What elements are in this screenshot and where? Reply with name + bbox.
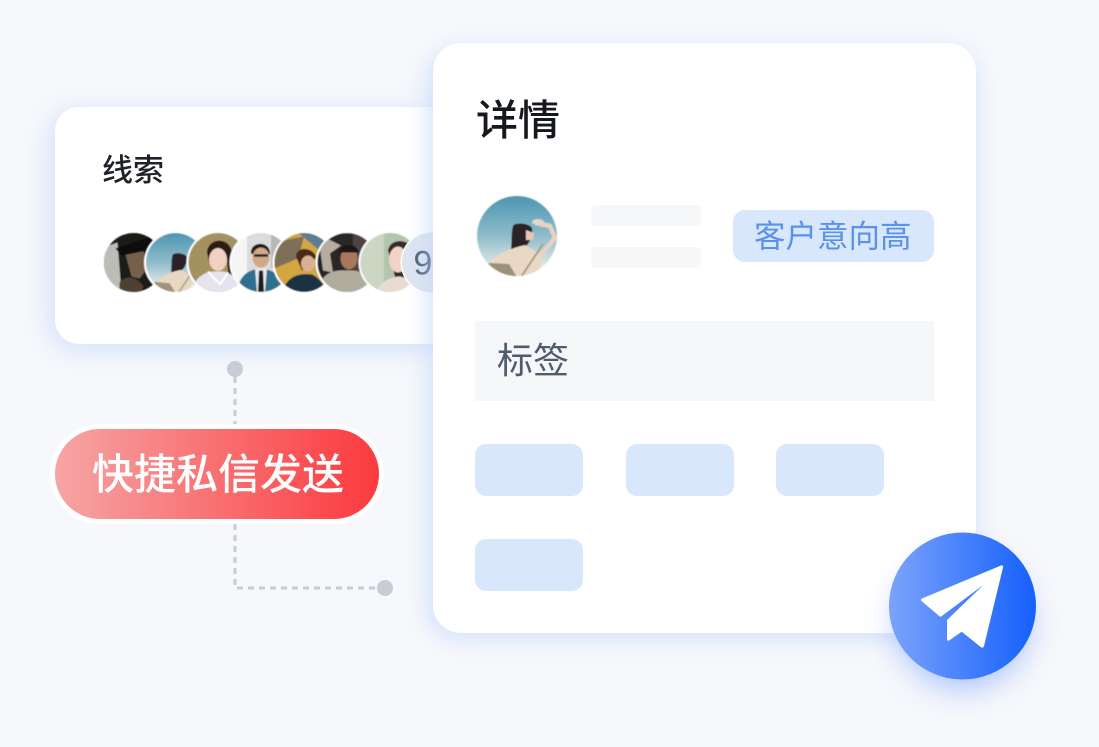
avatar 2 (143, 232, 196, 292)
badge: high customer intent: 客户意向高 (754, 218, 912, 254)
button: quick private message: 快捷私信发送 (92, 451, 344, 498)
button: quick private message (50, 424, 384, 524)
heading: leads: 线索 (102, 153, 164, 188)
panel: leads card (50, 107, 475, 349)
avatar 6 (314, 232, 368, 292)
panel: detail card (428, 43, 976, 638)
avatar 5 (272, 232, 324, 293)
avatar 1 (104, 232, 154, 293)
tags header (475, 321, 934, 401)
avatar row (104, 231, 422, 294)
avatar count badge: 99+ (414, 244, 471, 282)
icon: send paper plane (889, 532, 1036, 688)
tag placeholders (475, 444, 884, 591)
avatar 3 (186, 232, 238, 292)
tags header: 标签 (497, 340, 569, 381)
placeholder name lines (591, 205, 701, 268)
avatar: profile (476, 195, 558, 277)
heading: details: 详情 (476, 97, 560, 144)
avatar count badge (400, 231, 471, 294)
badge: high customer intent (733, 210, 934, 262)
avatar 4 (228, 232, 282, 293)
connector: dotted line from lead card to button and detail card (227, 361, 393, 596)
avatar 7 (358, 232, 410, 292)
